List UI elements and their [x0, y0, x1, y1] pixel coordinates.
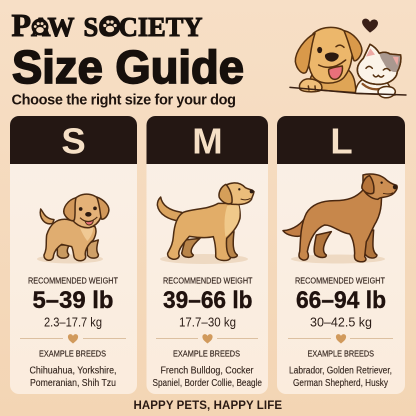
label: example breeds: EXAMPLE BREEDS	[173, 348, 240, 358]
breeds list: French Bulldog, Cocker	[160, 366, 254, 376]
illustration: dog and cat	[290, 19, 406, 98]
breeds list	[289, 366, 392, 389]
breeds list: Pomeranian, Shih Tzu	[30, 378, 116, 389]
label: example breeds: EXAMPLE BREEDS	[39, 348, 106, 358]
breeds list: Labrador, Golden Retriever,	[289, 366, 392, 376]
illustration: small puppy	[40, 194, 109, 261]
brand logo: Paw Society: PAW	[12, 7, 74, 43]
illustration: large dog	[283, 174, 397, 262]
weight in kg: 2.3–17.7 kg	[44, 314, 102, 330]
shadow M	[160, 254, 248, 264]
weight in lb: 5–39 lb	[32, 287, 114, 314]
label: example breeds: EXAMPLE BREEDS	[308, 348, 374, 358]
breeds list: Chihuahua, Yorkshire,	[30, 366, 116, 376]
card body M	[146, 116, 268, 394]
breeds list	[152, 366, 262, 389]
ledge line	[290, 87, 406, 95]
weight in lb: 39–66 lb	[163, 287, 252, 314]
label: recommended weight: RECOMMENDED WEIGHT	[163, 276, 253, 286]
label: recommended weight: RECOMMENDED WEIGHT	[28, 276, 119, 286]
card body S	[10, 116, 137, 394]
header L	[277, 116, 405, 164]
shadow S	[37, 254, 103, 264]
brand logo: Paw Society: SOCIETY	[84, 12, 202, 42]
panel: size M	[146, 116, 268, 394]
weight in lb: 66–94 lb	[296, 287, 386, 314]
weight in kg: 17.7–30 kg	[179, 314, 236, 330]
letter S: S	[61, 120, 86, 162]
brand logo: Paw Society	[12, 7, 202, 43]
divider with heart	[20, 334, 126, 344]
icon: heart	[362, 19, 378, 33]
panel: size L	[277, 116, 405, 394]
letter L: L	[330, 120, 353, 162]
header S	[10, 116, 137, 164]
header M	[146, 116, 268, 164]
footer tagline: HAPPY PETS, HAPPY LIFE	[134, 400, 282, 412]
letter M: M	[192, 120, 223, 162]
divider with heart	[288, 334, 393, 344]
title: Size Guide: Size Guide	[12, 41, 244, 93]
label: recommended weight: RECOMMENDED WEIGHT	[295, 276, 386, 286]
breeds list: Spaniel, Border Collie, Beagle	[152, 378, 262, 389]
illustration: medium dog	[157, 183, 254, 261]
shadow L	[291, 254, 385, 264]
panel: size S	[10, 116, 137, 394]
breeds list	[30, 366, 116, 389]
divider with heart	[156, 334, 258, 344]
breeds list: German Shepherd, Husky	[293, 378, 388, 389]
subtitle: Choose the right size for your dog	[12, 92, 236, 108]
card body L	[277, 116, 405, 394]
weight in kg: 30–42.5 kg	[310, 314, 372, 330]
